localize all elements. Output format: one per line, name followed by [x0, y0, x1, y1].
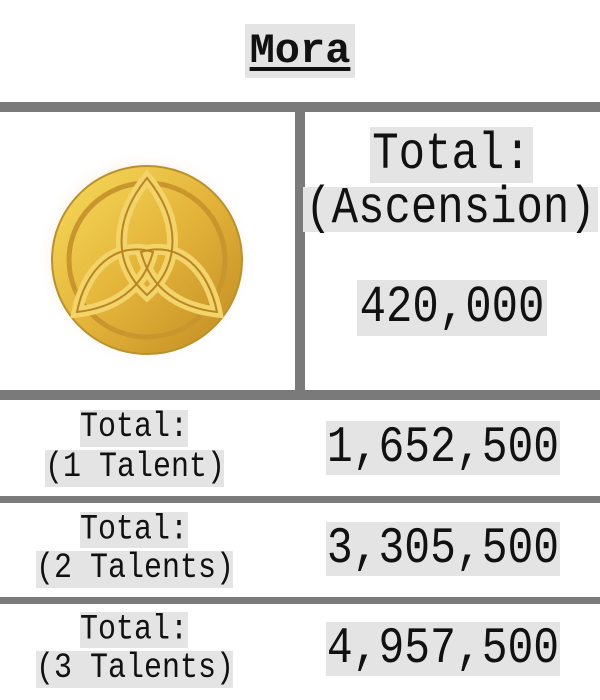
row: 2 talents: Total:	[80, 510, 188, 550]
row: 1 talent: Total:	[80, 408, 188, 448]
row: 1 talent	[45, 408, 560, 488]
row: 3 talents: 4,957,500	[327, 620, 559, 677]
icon: mora coin	[48, 161, 243, 355]
row: 2 talents	[36, 510, 560, 589]
value: ascension: 420,000	[360, 278, 544, 338]
row: 3 talents: (3 Talents)	[36, 649, 234, 689]
row: 3 talents	[36, 610, 560, 689]
row: 1 talent: (1 Talent)	[45, 448, 225, 488]
row: 2 talents: 3,305,500	[327, 520, 559, 577]
text: total ascension label	[303, 126, 598, 238]
text: total ascension label: (Ascension)	[305, 179, 596, 238]
row: 1 talent: 1,652,500	[327, 418, 559, 476]
row: 3 talents: Total:	[80, 610, 188, 650]
text: total ascension label: Total:	[372, 126, 531, 184]
title: Mora	[250, 27, 350, 75]
row: 2 talents: (2 Talents)	[36, 549, 234, 589]
